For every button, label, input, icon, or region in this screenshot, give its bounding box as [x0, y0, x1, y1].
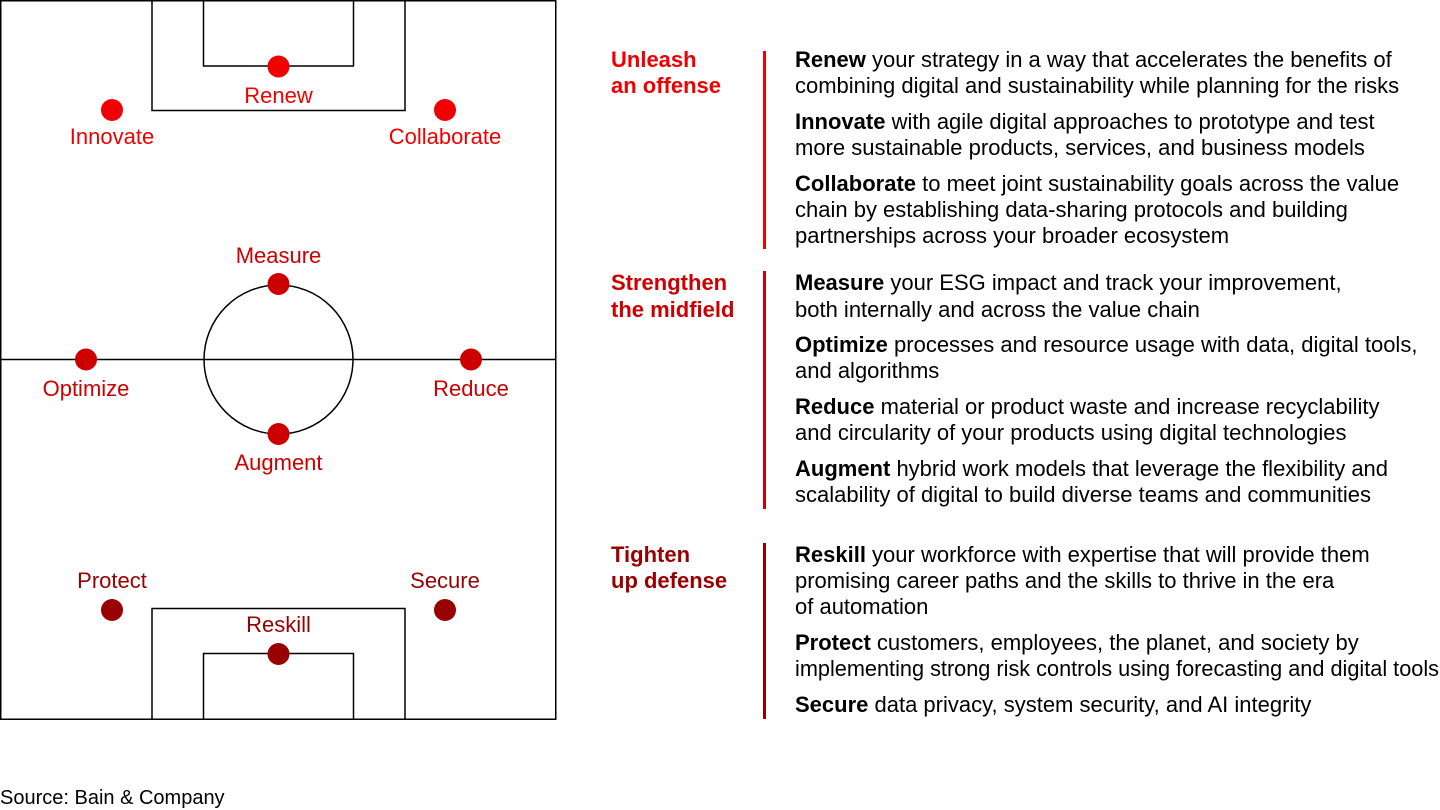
player: Reskill: Reskill — [246, 612, 311, 637]
text: Renew: combining digital and sustainability while planning for the risks — [795, 73, 1399, 98]
text: Innovate: more sustainable products, services, and business models — [795, 135, 1365, 160]
player: Protect: Protect — [77, 568, 147, 593]
player: Protect — [77, 568, 147, 621]
player: Secure: Secure — [410, 568, 480, 593]
heading: Tighten up defense: up defense — [611, 568, 727, 593]
text: Measure: both internally and across the value chain — [795, 297, 1200, 322]
text: Optimize: Optimize processes and resource usage with data, digital tools, — [795, 332, 1417, 357]
text: Collaborate: partnerships across your broader ecosystem — [795, 223, 1229, 248]
heading: Tighten up defense: Tighten — [611, 542, 690, 567]
player: Innovate: Innovate — [70, 124, 154, 149]
player: Secure — [410, 568, 480, 621]
player: Reskill — [246, 612, 311, 665]
heading: Strengthen the midfield: Strengthen — [611, 270, 727, 295]
player: Innovate — [70, 99, 154, 149]
text: Augment: Augment hybrid work models that leverage the flexibility and — [795, 456, 1388, 481]
heading: Unleash an offense: an offense — [611, 73, 721, 98]
text: Augment: scalability of digital to build diverse teams and communities — [795, 482, 1371, 507]
text: Measure: Measure your ESG impact and track your improvement, — [795, 270, 1342, 295]
player: Optimize: Optimize — [43, 376, 129, 401]
soccer field diagram — [0, 0, 556, 719]
text: Protect: Protect customers, employees, the planet, and society by — [795, 630, 1359, 655]
text: Secure: Secure data privacy, system security, and AI integrity — [795, 692, 1311, 717]
text: Protect: implementing strong risk controls using forecasting and digital tools — [795, 656, 1439, 681]
divider: midfield — [763, 271, 766, 509]
text: Innovate: Innovate with agile digital approaches to prototype and test — [795, 109, 1375, 134]
section: defense — [611, 542, 1439, 719]
section: offense — [611, 47, 1399, 249]
text: Collaborate: chain by establishing data-sharing protocols and building — [795, 197, 1348, 222]
player: Collaborate — [389, 99, 501, 149]
text: Protect — [795, 630, 1439, 681]
player: Reduce: Reduce — [433, 376, 509, 401]
text: Reskill: Reskill your workforce with expertise that will provide them — [795, 542, 1370, 567]
text: Reskill: of automation — [795, 594, 928, 619]
divider: offense — [763, 51, 766, 249]
field lines — [0, 0, 556, 719]
text: Collaborate: Collaborate to meet joint sustainability goals across the value — [795, 171, 1399, 196]
player: Optimize — [43, 348, 129, 401]
player: Collaborate: Collaborate — [389, 124, 501, 149]
player: Augment — [234, 423, 323, 475]
section: midfield — [611, 270, 1417, 509]
heading: Strengthen the midfield: the midfield — [611, 297, 734, 322]
text: Reduce: and circularity of your products using digital technologies — [795, 420, 1347, 445]
divider: defense — [763, 543, 766, 719]
player: Renew: Renew — [244, 83, 313, 108]
text: Renew: Renew your strategy in a way that accelerates the benefits of — [795, 47, 1392, 72]
text: Optimize: and algorithms — [795, 358, 939, 383]
source note: Source: Bain & Company — [0, 787, 225, 809]
player: Renew — [244, 56, 313, 108]
text: Reduce: Reduce material or product waste and increase recyclability — [795, 394, 1380, 419]
player: Reduce — [433, 348, 509, 401]
player: Measure: Measure — [236, 243, 321, 268]
text: Reskill: promising career paths and the skills to thrive in the era — [795, 568, 1335, 593]
player: Measure — [236, 243, 321, 295]
player: Augment: Augment — [234, 450, 323, 475]
heading: Unleash an offense: Unleash — [611, 47, 697, 72]
